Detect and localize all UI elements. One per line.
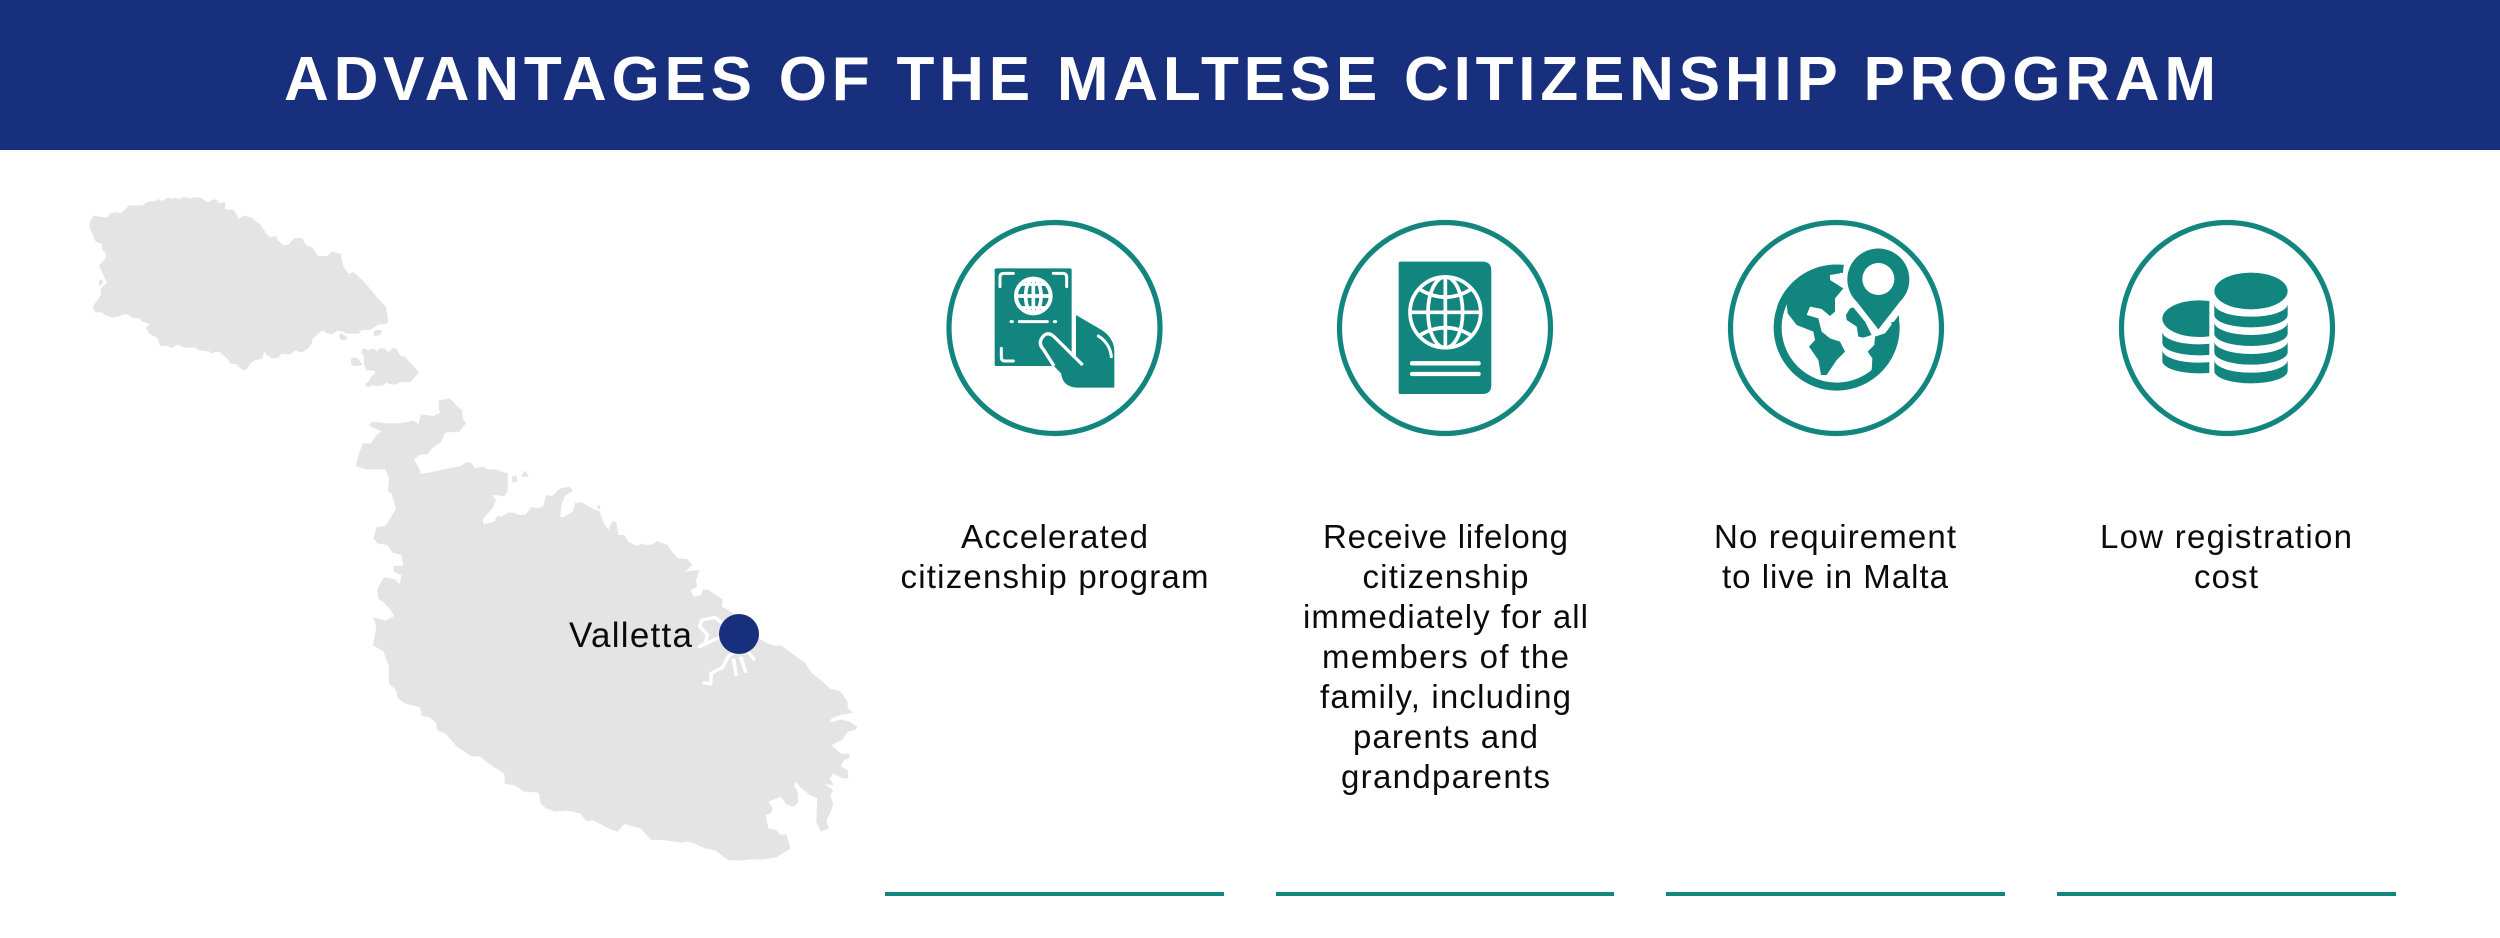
map: Gozo and Comino [89,197,419,387]
panel: low registration cost [2057,222,2396,896]
text: lifelong citizenship for family: Receive lifelong [1323,518,1568,555]
text: low registration cost: Low registration [2100,518,2352,555]
panel: lifelong citizenship: members of the [1322,638,1569,675]
panel: lifelong citizenship: parents and [1353,718,1538,755]
panel: accelerated citizenship: citizenship program [900,558,1208,595]
divider line [885,892,1224,896]
divider line [2057,892,2396,896]
panel: lifelong citizenship: family, including [1320,678,1571,715]
map: main island of Malta [356,398,858,861]
icon ring [1730,222,1942,434]
panel: lifelong citizenship [1276,222,1614,896]
icon ring [949,222,1160,434]
location dot: Valletta [719,614,759,654]
panel: low registration cost: cost [2194,558,2258,595]
icon ring [2122,222,2332,434]
panel: map of Malta [89,197,858,861]
icon ring [1340,222,1550,434]
icon: globe with location pin [1777,248,1909,387]
divider line [1666,892,2005,896]
panel: lifelong citizenship: grandparents [1341,758,1550,795]
text: accelerated citizenship program: Accelerated [961,518,1148,555]
panel: no residence requirement [1666,222,2005,896]
header band with title [0,0,2500,150]
panel: no residence requirement: to live in Malta [1722,558,1949,595]
panel: lifelong citizenship: citizenship [1362,558,1528,595]
divider line [1276,892,1614,896]
icon: passport scan with hand [995,268,1114,388]
icon: coin stacks [2162,273,2288,383]
panel: lifelong citizenship: immediately for all [1303,598,1588,635]
icon: passport with globe [1399,262,1491,394]
title: ADVANTAGES OF THE MALTESE CITIZENSHIP PROGRAM [284,45,2216,114]
text: no requirement to live in Malta: No requirement [1714,518,1956,555]
map label: Valletta: Valletta [569,616,693,655]
panel: accelerated citizenship [885,222,1224,896]
